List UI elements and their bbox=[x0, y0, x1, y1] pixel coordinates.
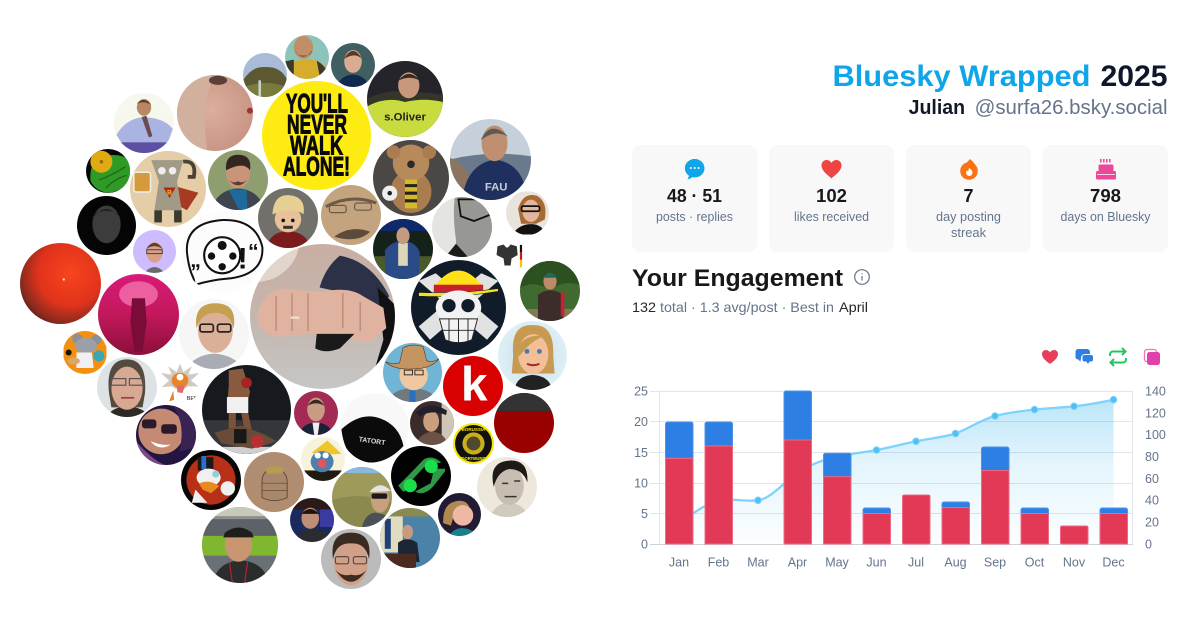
avatar: coffee pot robot bbox=[130, 151, 206, 227]
avatar: stadium selfie bbox=[202, 507, 278, 583]
avatar: neon goalkeeper jersey bbox=[367, 61, 443, 137]
avatar: Borussia badge: DORTMUND bbox=[462, 455, 485, 460]
month labels: Apr bbox=[788, 556, 807, 570]
avatar: YNWA yellow bbox=[262, 81, 371, 190]
avatar: grey mouse on orange bbox=[63, 331, 107, 374]
avatar: red sphere bbox=[20, 243, 101, 324]
stat card: posting streak: day posting bbox=[936, 210, 1001, 224]
right axis labels bbox=[1145, 384, 1166, 552]
avatar: greyscale profile with glasses bbox=[432, 197, 492, 257]
month labels: May bbox=[825, 556, 850, 570]
avatar: straw hat jolly roger bbox=[411, 260, 506, 355]
stat card: posting streak: streak bbox=[951, 226, 987, 240]
right axis labels: 40 bbox=[1145, 494, 1159, 508]
avatar: man in suit on magenta bbox=[294, 391, 338, 435]
avatar: football speech bubble: „ bbox=[190, 248, 201, 272]
avatar: Borussia badge: BORUSSIA bbox=[462, 426, 486, 431]
line points bbox=[755, 396, 1117, 504]
avatar: football speech bubble bbox=[186, 219, 264, 285]
avatar: man with long hair bbox=[97, 357, 157, 417]
avatar: YNWA yellow: WALK bbox=[290, 130, 343, 160]
avatar: man in hoodie with landscape bbox=[450, 119, 531, 200]
avatar: yellow flower bbox=[86, 149, 130, 193]
avatar: man on teal bbox=[331, 43, 375, 87]
right axis labels: 20 bbox=[1145, 516, 1159, 530]
month labels: Jan bbox=[669, 556, 689, 570]
avatar: spiky cartoon character: BEEF bbox=[187, 396, 201, 402]
avatar: sepia sketch man bbox=[321, 185, 381, 245]
avatar: smiling man with beard bbox=[321, 529, 381, 589]
avatar: beehive drawing bbox=[244, 452, 304, 512]
avatar: teddy bear with scarf bbox=[373, 140, 449, 216]
avatar: woman with glasses bbox=[506, 192, 549, 234]
left axis labels: 5 bbox=[641, 507, 648, 521]
avatar: blonde cartoon woman bbox=[438, 493, 481, 536]
user name and handle: @surfa26.bsky.social bbox=[975, 97, 1168, 119]
avatar: dark and red flag bbox=[494, 393, 554, 453]
month labels: Nov bbox=[1063, 556, 1086, 570]
avatar: football speech bubble: ! bbox=[238, 242, 248, 275]
avatar: cowboy cartoon bbox=[383, 343, 442, 402]
month labels bbox=[669, 556, 1125, 570]
title: 2025 bbox=[1100, 60, 1168, 93]
cumulative area bbox=[679, 400, 1114, 544]
avatar: man in blue shirt and tie bbox=[114, 93, 174, 153]
avatar: priest with blue screens bbox=[290, 498, 334, 542]
avatar: man with cap bbox=[410, 401, 454, 445]
title: Bluesky Wrapped bbox=[832, 60, 1090, 93]
avatar: eagle and flag bbox=[496, 244, 522, 268]
left axis labels bbox=[634, 384, 648, 552]
engagement summary: total · 1.3 avg/post · Best in bbox=[660, 299, 834, 315]
left axis labels: 25 bbox=[634, 384, 648, 398]
avatar: green arrows logo bbox=[391, 446, 451, 506]
right axis labels: 140 bbox=[1145, 384, 1166, 398]
avatar: grover with yellow hat bbox=[301, 437, 345, 481]
avatar: purple-toned bald man with glasses bbox=[136, 405, 196, 465]
avatar: pink stage bbox=[98, 274, 179, 355]
cumulative line bbox=[679, 400, 1114, 522]
avatar: dark portrait bbox=[77, 196, 136, 255]
icon: quotes legend bbox=[1144, 350, 1160, 365]
avatar: person in forest bbox=[520, 261, 580, 321]
icon: reposts legend bbox=[1110, 348, 1126, 366]
month labels: Mar bbox=[747, 556, 769, 570]
left axis labels: 10 bbox=[634, 476, 648, 490]
avatar: lilac 3D avatar bbox=[133, 230, 176, 273]
stat card: posting streak: 7 bbox=[963, 186, 974, 206]
avatar: person in field with sunglasses bbox=[332, 467, 392, 527]
blue reply bars bbox=[666, 391, 1128, 514]
avatar: red k logo: k bbox=[461, 358, 488, 411]
stat card: days on Bluesky: days on Bluesky bbox=[1060, 210, 1151, 224]
month labels: Feb bbox=[708, 556, 729, 570]
icon: info bbox=[855, 270, 869, 284]
icon: cake bbox=[1096, 159, 1116, 180]
stat card: likes: likes received bbox=[794, 210, 869, 224]
stat card: likes bbox=[769, 145, 894, 252]
avatar: red k logo bbox=[443, 356, 503, 416]
avatar: spiky cartoon character bbox=[159, 362, 201, 404]
right axis labels: 0 bbox=[1145, 538, 1152, 552]
avatar: fist bump main portrait bbox=[250, 244, 395, 389]
icon: chat bubble bbox=[685, 159, 704, 179]
right axis labels: 60 bbox=[1145, 472, 1159, 486]
left axis labels: 15 bbox=[634, 446, 648, 460]
icon: heart bbox=[822, 160, 842, 178]
avatar: Borussia badge bbox=[453, 423, 494, 464]
stat card: posting streak bbox=[906, 145, 1031, 252]
icon: flame bbox=[960, 159, 978, 180]
chart grid bbox=[650, 391, 1133, 544]
right axis labels: 100 bbox=[1145, 428, 1166, 442]
avatar: blonde bitmoji woman bbox=[498, 321, 567, 390]
avatar: bearded man with scarf bbox=[208, 150, 268, 210]
avatar: press room briefing bbox=[380, 508, 440, 568]
avatar: black beanie TATORT: TATORT bbox=[358, 436, 386, 447]
month labels: Dec bbox=[1102, 556, 1125, 570]
avatar: lego figure bbox=[258, 188, 318, 248]
stat card: days on Bluesky: 798 bbox=[1090, 186, 1121, 206]
avatar: man in yellow shirt bbox=[285, 35, 329, 79]
month labels: Aug bbox=[944, 556, 967, 570]
avatar: blonde close-up bbox=[177, 75, 253, 151]
month labels: Jun bbox=[866, 556, 887, 570]
stat card: likes: 102 bbox=[816, 186, 847, 206]
right axis labels: 80 bbox=[1145, 450, 1159, 464]
icon: likes legend bbox=[1042, 350, 1058, 364]
stat card: posts and replies: posts · replies bbox=[656, 210, 733, 224]
avatar: man in hoodie with landscape: FAU bbox=[485, 181, 507, 193]
chart legend icons bbox=[1042, 348, 1160, 366]
left axis labels: 20 bbox=[634, 415, 648, 429]
month labels: Oct bbox=[1025, 556, 1045, 570]
avatar: man in blue suit at night bbox=[373, 219, 433, 279]
stat card: posts and replies: 48 · 51 bbox=[667, 186, 722, 206]
avatar: black beanie TATORT bbox=[341, 416, 404, 462]
avatar: coffee pot robot: B bbox=[167, 189, 172, 196]
avatar: football speech bubble: “ bbox=[248, 240, 259, 264]
avatar: Ali boxing photo bbox=[202, 364, 290, 454]
user name and handle: Julian bbox=[909, 97, 965, 119]
avatar: blonde man with glasses bbox=[179, 299, 249, 369]
engagement summary: 132 bbox=[632, 299, 656, 315]
engagement summary: April bbox=[839, 299, 868, 315]
stat card: days on Bluesky bbox=[1043, 145, 1168, 252]
month labels: Jul bbox=[908, 556, 924, 570]
avatar: neon goalkeeper jersey: s.Oliver bbox=[384, 111, 426, 123]
icon: replies legend bbox=[1076, 349, 1093, 364]
red like bars bbox=[666, 440, 1128, 544]
avatar: scrooge duck bbox=[181, 450, 241, 510]
right column bbox=[620, 0, 1200, 630]
stat card: posts and replies bbox=[632, 145, 757, 252]
heading: your engagement: Your Engagement bbox=[632, 265, 843, 292]
right axis labels: 120 bbox=[1145, 406, 1166, 420]
month labels: Sep bbox=[984, 556, 1006, 570]
left axis labels: 0 bbox=[641, 538, 648, 552]
avatar: vintage portrait bbox=[477, 457, 537, 517]
avatar cluster bbox=[20, 35, 580, 589]
combo chart: monthly engagement bbox=[634, 384, 1166, 570]
avatar: castle on hill bbox=[243, 53, 287, 97]
